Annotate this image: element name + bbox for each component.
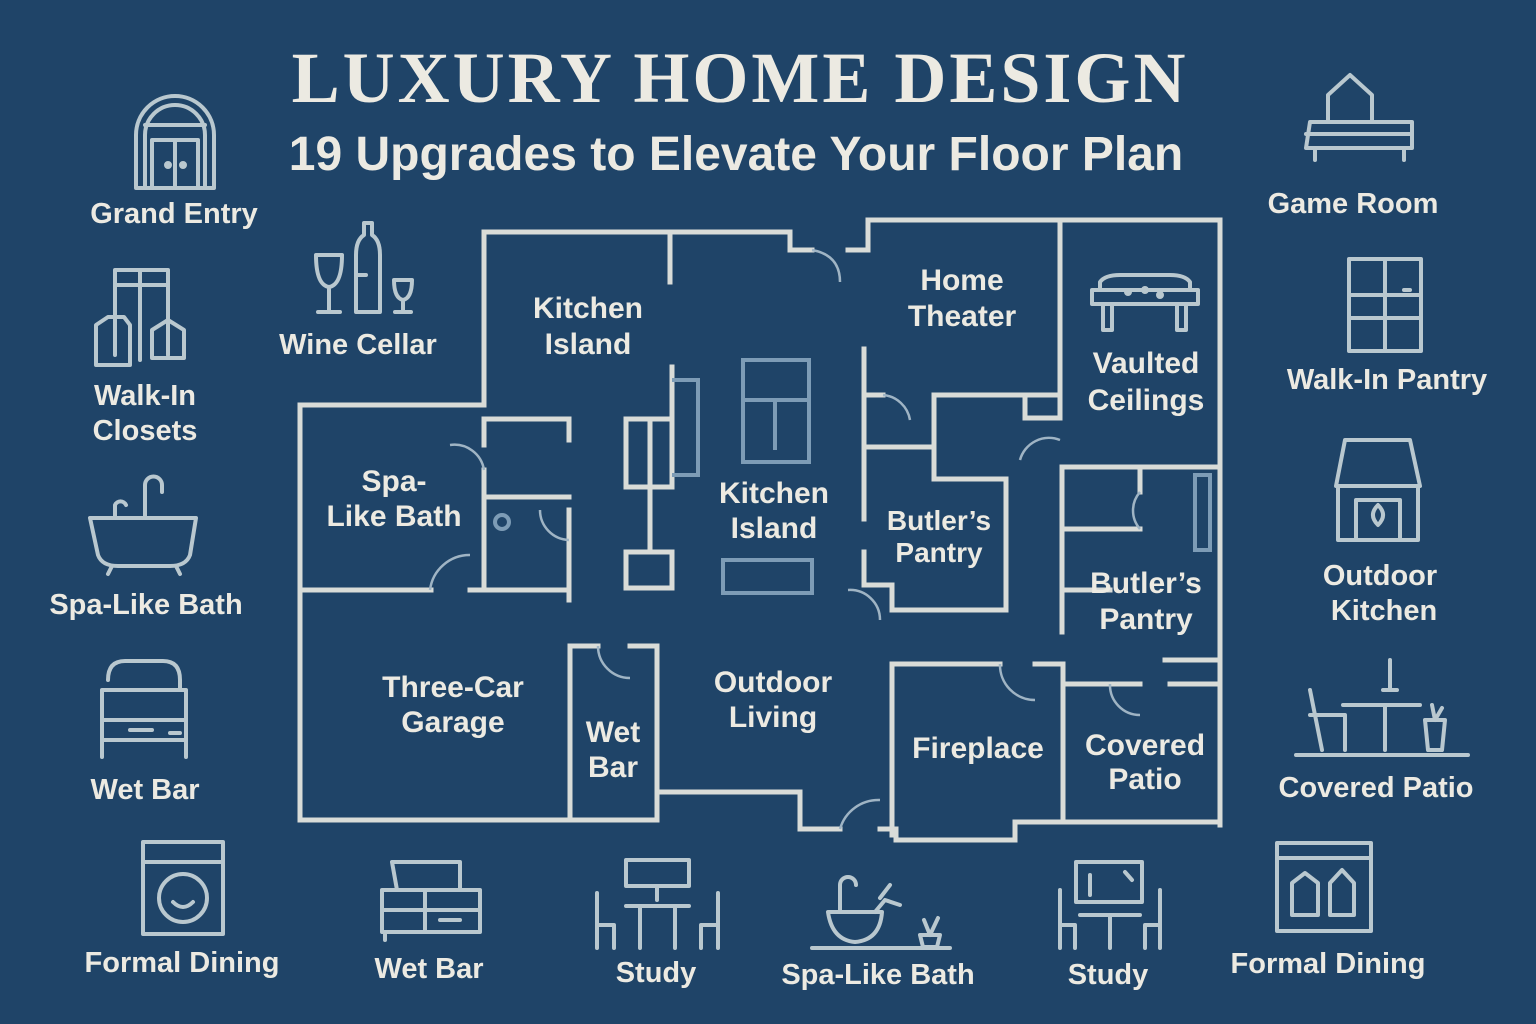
subtitle: 19 Upgrades to Elevate Your Floor Plan	[289, 128, 1183, 181]
label: study 2: Study	[1068, 959, 1148, 991]
floor plan: Garage	[401, 706, 505, 739]
floor plan: Bar	[588, 751, 638, 784]
label: spa-like bath bottom: Spa-Like Bath	[781, 959, 975, 991]
floor plan	[300, 220, 1220, 840]
icon: walk-in closets	[96, 270, 184, 365]
label: Kitchen	[533, 292, 643, 325]
label: walk-in closets: Closets	[93, 415, 197, 447]
label: study 1: Study	[616, 957, 696, 989]
floor plan: Butler’s	[887, 505, 991, 536]
label: spa-like bath: Spa-Like Bath	[49, 589, 243, 621]
label: outdoor kitchen: Kitchen	[1331, 595, 1437, 627]
floor plan: Butler’s	[1090, 567, 1202, 600]
icon: wine	[316, 223, 412, 312]
floor plan: Patio	[1108, 763, 1182, 796]
floor plan: Covered	[1085, 729, 1205, 762]
icon: desk	[382, 862, 480, 940]
icon: covered patio	[1296, 660, 1468, 755]
label: game room: Game Room	[1268, 188, 1438, 220]
floor plan: Pantry	[895, 537, 983, 568]
label: wet bar bottom: Wet Bar	[374, 953, 484, 985]
floor plan: Like Bath	[326, 500, 462, 533]
icon: study 2	[1060, 862, 1160, 948]
floor plan: Theater	[908, 300, 1017, 333]
floor plan: Kitchen	[719, 477, 829, 510]
floor plan: Spa-	[361, 465, 427, 498]
title: LUXURY HOME DESIGN	[292, 38, 1188, 118]
label: Island	[545, 328, 631, 361]
floor plan: Ceilings	[1088, 384, 1204, 417]
label: wine cellar: Wine Cellar	[279, 329, 437, 361]
floor plan: Vaulted	[1093, 347, 1199, 380]
icon: walk-in pantry	[1349, 259, 1421, 351]
floor plan: Island	[731, 512, 817, 545]
icon: outdoor kitchen	[1336, 440, 1420, 540]
label: formal dining left: Formal Dining	[85, 947, 279, 979]
icon: wet bar	[102, 661, 186, 757]
floor plan: Outdoor	[714, 666, 832, 699]
floor plan: Three-Car	[382, 671, 524, 704]
label: grand entry: Grand Entry	[90, 198, 258, 230]
floor plan: Pantry	[1099, 603, 1193, 636]
label: walk-in closets: Walk-In	[94, 380, 196, 412]
icon: study bottom	[597, 860, 718, 948]
label: outdoor kitchen: Outdoor	[1323, 560, 1437, 592]
floor plan: Home	[920, 264, 1004, 297]
floor plan: Wet	[586, 716, 640, 749]
floor plan: Living	[729, 701, 817, 734]
icon: bathtub	[90, 476, 196, 574]
label: covered patio: Covered Patio	[1278, 772, 1474, 804]
icon: grand entry	[136, 96, 214, 188]
icon: spa bath bottom	[812, 877, 950, 948]
label: walk-in pantry: Walk-In Pantry	[1287, 364, 1487, 396]
label: formal dining right: Formal Dining	[1231, 948, 1425, 980]
icon: game room	[1306, 75, 1412, 160]
icon: formal dining right	[1277, 843, 1371, 931]
label: wet bar left: Wet Bar	[90, 774, 200, 806]
icon: sofa in vaulted ceiling	[1092, 275, 1198, 330]
icon: washer	[143, 842, 223, 934]
floor plan: Fireplace	[912, 732, 1044, 765]
